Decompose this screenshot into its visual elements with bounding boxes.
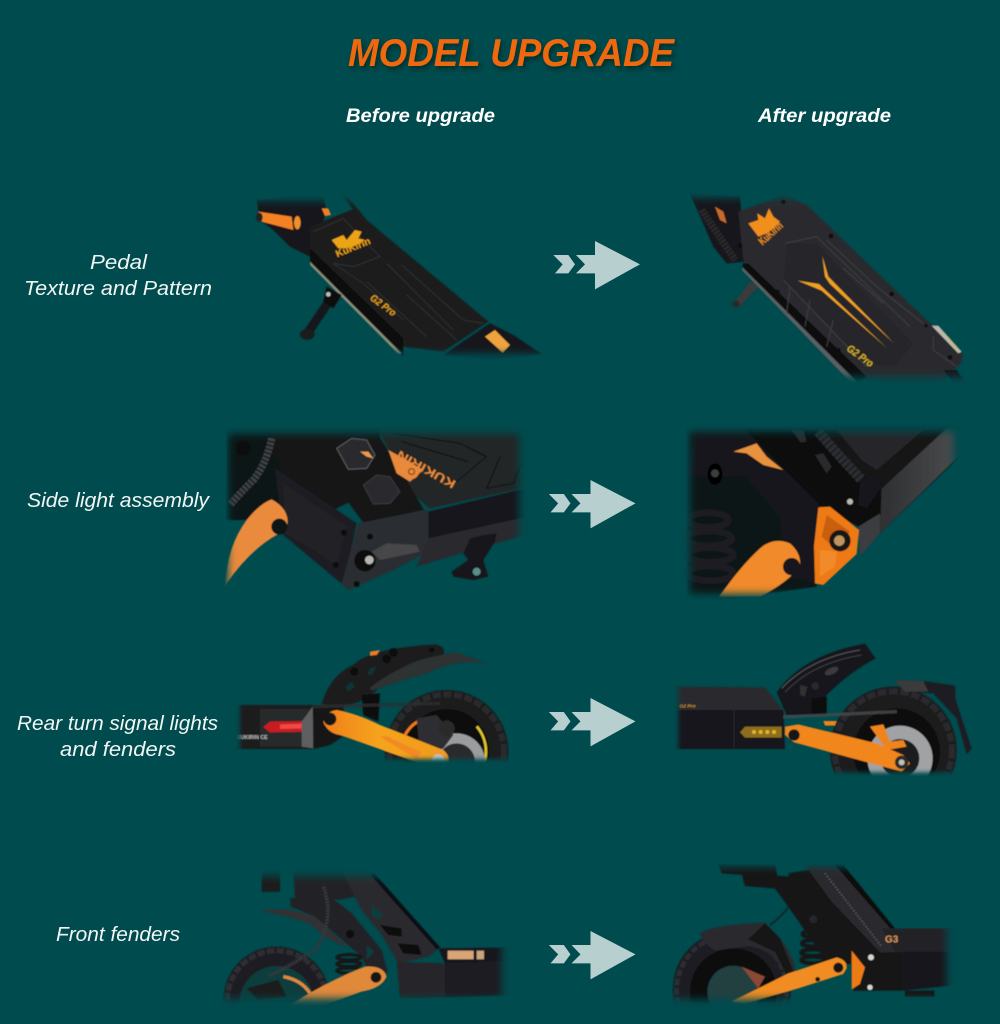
- row label: rear turn signal lights and fenders: and fenders: [60, 739, 176, 761]
- row label: side light assembly: Side light assembly: [27, 490, 210, 512]
- photo: side light after upgrade: [685, 423, 967, 600]
- photo: side light before upgrade: KUKIRIN: [394, 448, 458, 491]
- photo: pedal before upgrade: [256, 193, 542, 360]
- row label: pedal: Texture and Pattern: [24, 278, 212, 300]
- arrow: pedal row: [553, 241, 640, 289]
- arrow: rear light row: [549, 698, 635, 746]
- row label: rear turn signal lights and fenders: [17, 713, 218, 761]
- photo: pedal before upgrade: G2 Pro: [368, 293, 398, 319]
- photo: rear light after upgrade: [676, 643, 972, 776]
- row label: pedal: Pedal: [90, 252, 148, 274]
- row label: front fenders: Front fenders: [56, 924, 180, 946]
- photo: front fender after upgrade: [672, 864, 950, 1004]
- row label: pedal: [24, 252, 212, 300]
- title: MODEL UPGRADE: [348, 32, 675, 75]
- photo: side light before upgrade: [225, 427, 537, 590]
- photo: front fender before upgrade: [223, 872, 506, 1005]
- column heading: before upgrade: Before upgrade: [346, 106, 495, 127]
- photo: rear light after upgrade: G2 Pro: [679, 704, 696, 710]
- photo: front fender after upgrade: G3: [885, 935, 899, 946]
- photo: pedal before upgrade: KuKirin: [334, 236, 372, 260]
- photo: rear light before upgrade: KUKIRIN CE: [237, 735, 268, 741]
- photo: pedal after upgrade: [690, 193, 967, 390]
- arrow: front fender row: [549, 931, 635, 979]
- column heading: after upgrade: After upgrade: [757, 106, 891, 127]
- arrow: side light row: [549, 480, 635, 528]
- row label: rear turn signal lights and fenders: Rear turn signal lights: [17, 713, 218, 735]
- photo: rear light before upgrade: [237, 644, 509, 763]
- photo: pedal after upgrade: G2 Pro: [844, 343, 876, 370]
- photo: pedal after upgrade: KuKirin: [757, 220, 786, 248]
